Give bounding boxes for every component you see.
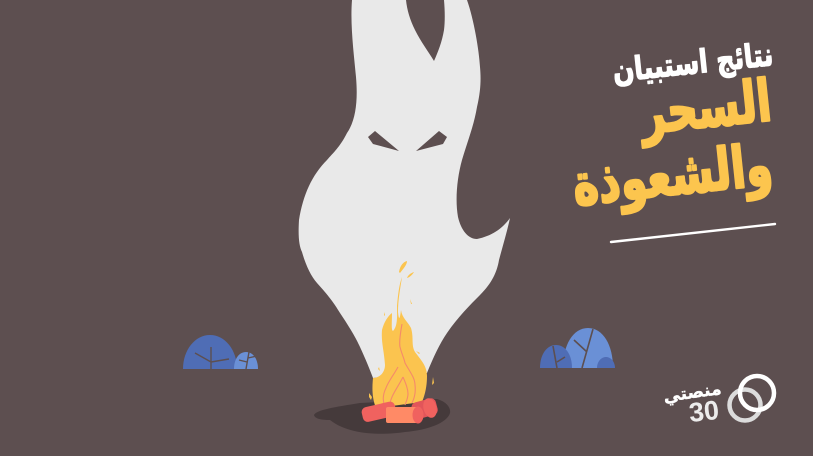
ghost left eye [368,131,399,151]
logo [662,376,774,428]
flame [372,277,427,408]
left log [361,401,397,423]
flame inner lines [383,324,415,407]
ground shadow [314,399,450,434]
heading line 1: السحر [635,67,775,149]
back log [410,397,439,420]
left bush [183,335,258,369]
subtitle: نتائج استبيان [611,35,775,90]
front log [386,407,420,423]
logo wordmark: منصتي [662,379,723,407]
right bush [540,328,615,368]
logo number: 30 [687,395,721,428]
heading line 2: والشعوذة [569,131,776,220]
ghost right eye [416,131,447,151]
sparks [369,261,434,400]
ghost [299,0,510,378]
campfire [314,261,450,434]
title block [569,35,776,220]
title underline [611,224,775,242]
logo rings [730,376,774,420]
